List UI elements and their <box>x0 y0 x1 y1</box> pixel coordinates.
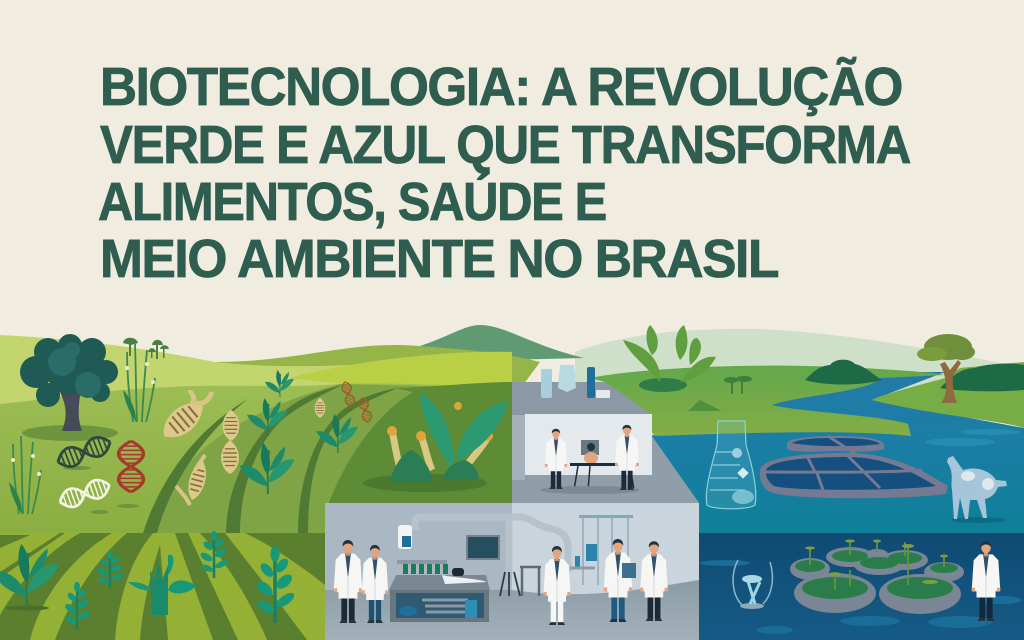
lab block <box>512 382 699 503</box>
title: ALIMENTOS, SAÚDE E <box>98 172 606 232</box>
side table <box>520 567 541 596</box>
left river bank <box>590 366 945 436</box>
scientist <box>972 541 1000 621</box>
scientists <box>334 539 668 625</box>
lab monitor <box>466 535 500 560</box>
right river bank <box>872 362 1024 428</box>
shrubs <box>805 360 1024 391</box>
title: MEIO AMBIENTE NO BRASIL <box>100 229 778 289</box>
test tubes <box>397 560 448 574</box>
water upper <box>650 372 1024 533</box>
room wall <box>525 414 652 475</box>
textured crop rows <box>150 384 512 533</box>
acacia tree <box>917 334 975 403</box>
large leaf plant with fungus <box>363 392 508 492</box>
aquaculture ponds <box>760 436 948 498</box>
panel: background hills <box>0 325 1024 420</box>
tan seed forms <box>156 390 325 505</box>
title: VERDE E AZUL QUE TRANSFORMA <box>100 115 910 175</box>
DNA helices <box>55 381 373 514</box>
lab walls <box>325 503 512 640</box>
crop plants <box>0 531 296 630</box>
dispenser <box>398 525 412 549</box>
ceiling pipes <box>415 517 568 572</box>
water highlights <box>925 429 1020 446</box>
field paths <box>143 385 397 533</box>
reed plants <box>9 344 155 514</box>
desk and monitor <box>540 440 640 494</box>
panel: upper laboratory <box>512 365 699 503</box>
title: BIOTECNOLOGIA: A REVOLUÇÃO <box>100 57 902 117</box>
lab floor <box>325 580 699 640</box>
floating planters <box>790 540 964 614</box>
water patches <box>700 560 1022 634</box>
field plants <box>240 370 358 494</box>
panel: lower laboratory <box>325 503 699 640</box>
title <box>98 57 910 289</box>
distant trees <box>123 338 169 359</box>
apparatus rack <box>570 515 633 585</box>
small trees <box>688 376 752 411</box>
lab bench <box>389 568 490 622</box>
submerged glass specimen <box>733 560 772 609</box>
dark plot <box>328 382 512 505</box>
glass bottles <box>541 365 610 398</box>
panel: blue biotechnology deep water <box>699 533 1024 640</box>
tropical plant <box>623 325 716 392</box>
seated scientists <box>545 425 639 490</box>
robot creature <box>947 456 1007 523</box>
panel: crop stripes <box>0 531 330 640</box>
glass flask <box>706 421 756 509</box>
big tree <box>20 334 118 441</box>
stand <box>500 572 520 596</box>
panel: green biotechnology field <box>0 334 512 533</box>
field ground <box>0 383 512 533</box>
panel: right landscape <box>590 325 1024 533</box>
